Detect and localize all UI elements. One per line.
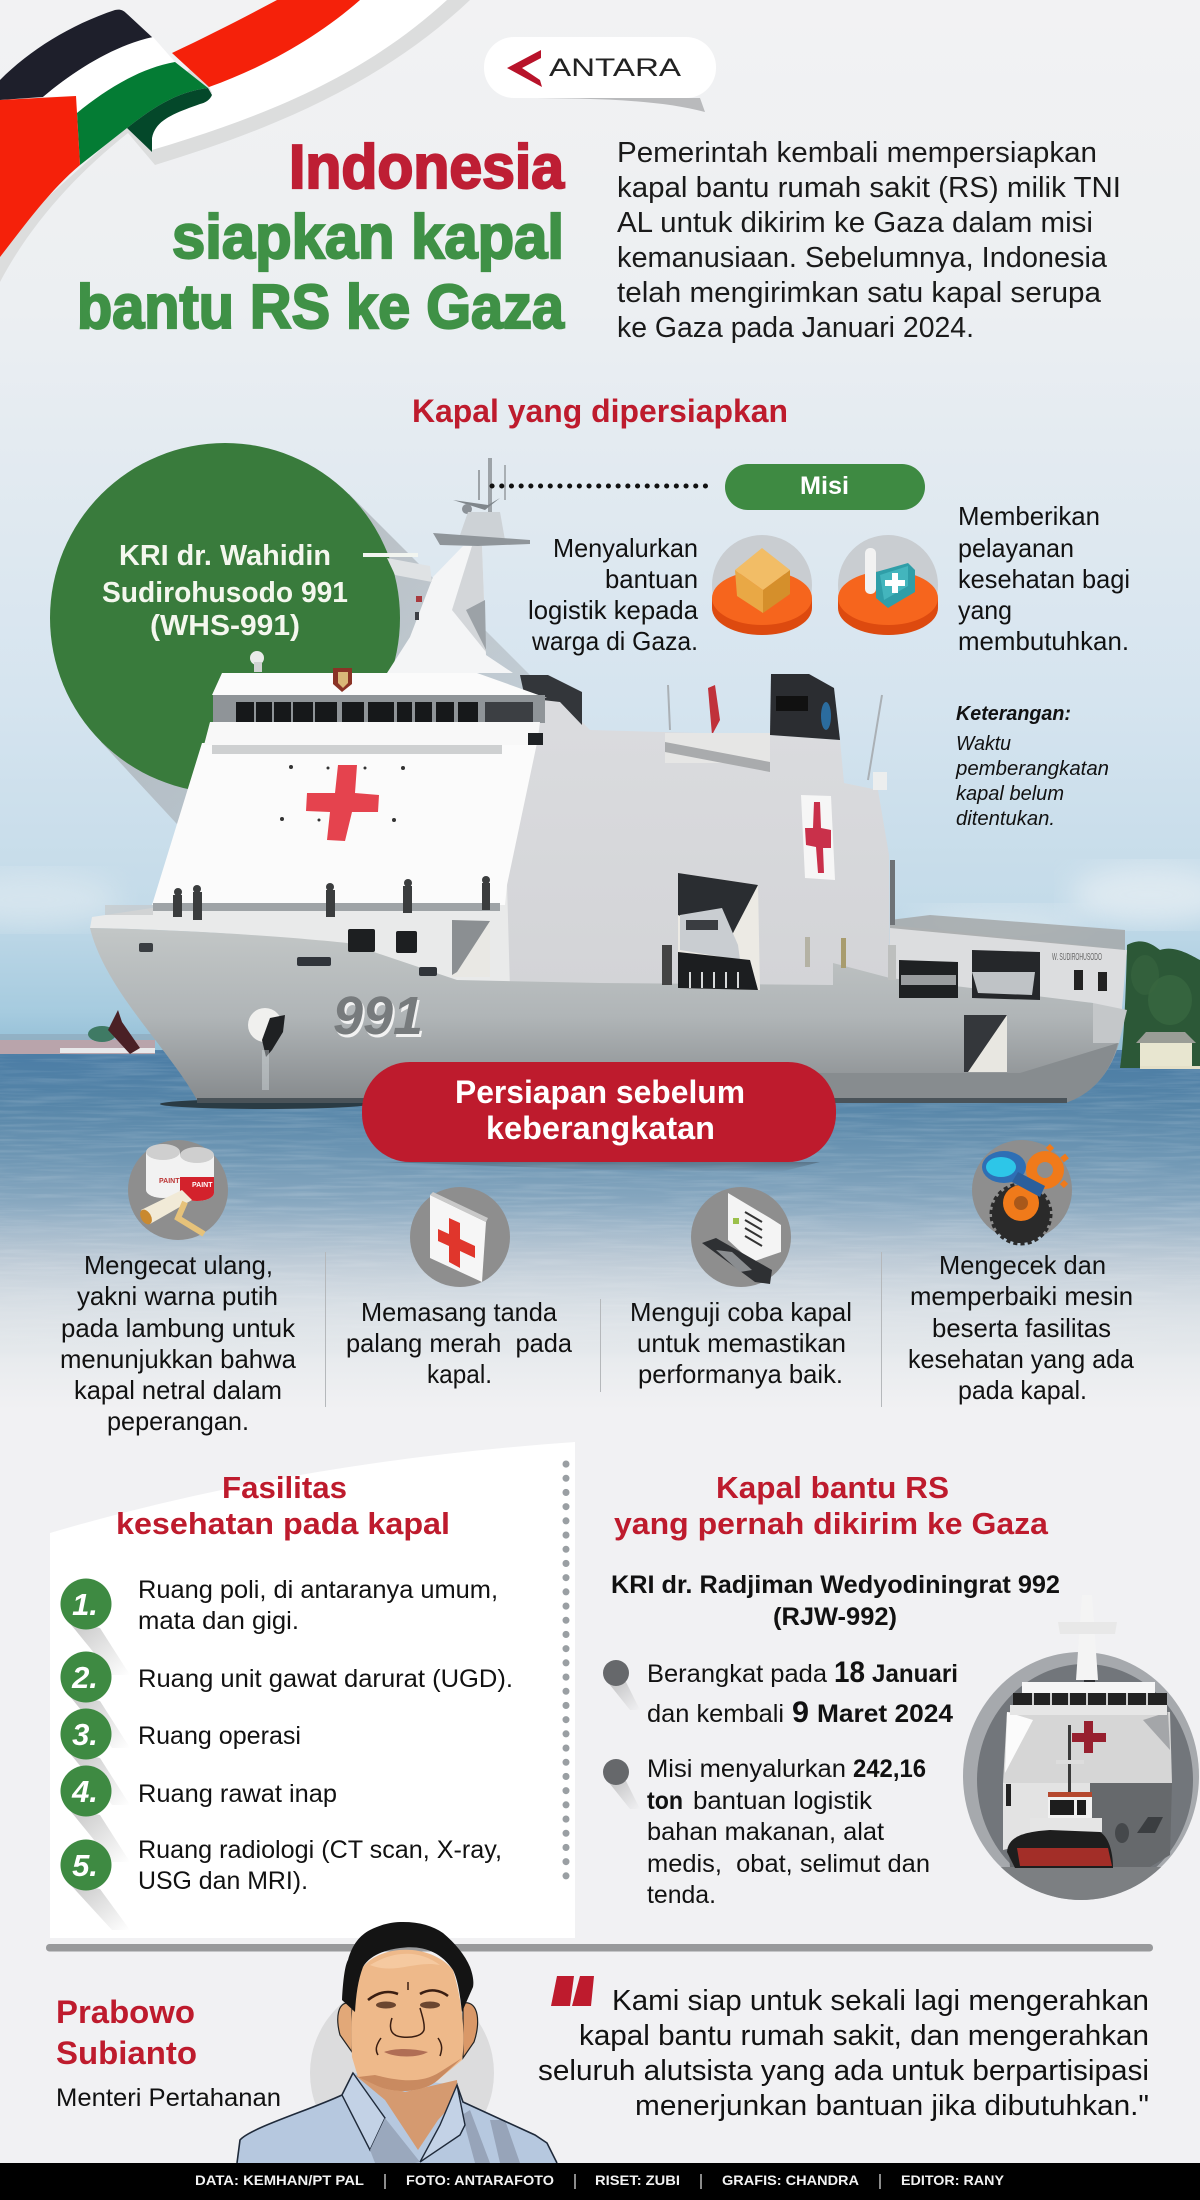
list items: USG dan MRI). — [138, 1867, 308, 1895]
footer credits: RISET: ZUBI — [595, 2172, 680, 2188]
ship aft bays — [888, 945, 1107, 1072]
bullet: departure dates: Maret 2024 — [817, 1700, 953, 1728]
brows and eyes — [368, 1990, 448, 2000]
quote text — [538, 1985, 1149, 2122]
portrait: Prabowo Subianto — [237, 1922, 557, 2165]
text: repaint — [60, 1250, 297, 1436]
heading: Kapal yang dipersiapkan: Kapal yang dipersiapkan — [412, 393, 788, 429]
ship hull number 991: 991 — [333, 986, 423, 1046]
text: ship trial — [630, 1297, 852, 1389]
heading: Fasilitas kesehatan pada kapal: Fasilitas — [222, 1470, 347, 1505]
quote text: kapal bantu rumah sakit, dan mengerahkan — [579, 2020, 1149, 2052]
quote mark — [551, 1976, 594, 2006]
ship deck rail and crew — [105, 765, 500, 920]
note: Keterangan: ditentukan. — [956, 808, 1055, 830]
heading: Kapal bantu RS yang pernah dikirim ke Gaza: yang pernah dikirim ke Gaza — [614, 1506, 1049, 1541]
icon: engine gears — [972, 1140, 1072, 1243]
bullet: mission cargo — [603, 1755, 930, 1909]
list items — [138, 1576, 513, 1895]
mission text: health service: yang — [958, 595, 1012, 625]
photo ship mast — [1058, 1595, 1117, 1692]
numbered list markers: 5. — [72, 1848, 98, 1883]
heading: Fasilitas kesehatan pada kapal — [116, 1470, 450, 1541]
text: engine check — [908, 1250, 1135, 1405]
far shoreline with buildings and trees — [0, 941, 1200, 1069]
ship aft bays: W. SUDIROHUSODO — [1052, 952, 1102, 963]
ears — [338, 2003, 352, 2052]
bullet: departure dates: Berangkat pada — [647, 1660, 827, 1688]
bullet: mission cargo: ton — [647, 1787, 683, 1815]
ship mast — [250, 458, 530, 673]
panel: ship name circle — [50, 443, 400, 793]
shadow of green circle — [101, 494, 600, 1000]
quote text: seluruh alutsista yang ada untuk berpartisipasi — [538, 2055, 1149, 2087]
quote text: Kami siap untuk sekali lagi mengerahkan — [612, 1985, 1149, 2017]
heading: Fasilitas kesehatan pada kapal: kesehatan pada kapal — [116, 1506, 450, 1541]
ship hull number 991: 991 — [335, 989, 425, 1049]
photo ship bridge — [1010, 1682, 1167, 1753]
bullet: departure dates: 18 — [834, 1656, 865, 1689]
mission text: logistics: logistik kepada — [528, 595, 699, 625]
title: Indonesia — [289, 133, 564, 202]
mission text: health service: Memberikan — [958, 501, 1100, 531]
pill: Persiapan sebelum keberangkatan — [362, 1062, 836, 1172]
heading: Kapal bantu RS yang pernah dikirim ke Gaza — [614, 1470, 1049, 1541]
icon: logistics box — [712, 535, 812, 635]
text: engine check: kesehatan yang ada — [908, 1344, 1135, 1374]
text: red cross sign — [346, 1297, 573, 1389]
footer credits: GRAFIS: CHANDRA — [722, 2172, 859, 2188]
list items: Ruang poli, di antaranya umum, — [138, 1576, 498, 1604]
pill: Misi: Misi — [800, 472, 849, 500]
photo: KRI dr. Radjiman ship circle — [963, 1622, 1199, 1900]
nose and mouth lines — [376, 1982, 442, 2056]
text: engine check: Mengecek dan — [939, 1250, 1106, 1280]
ship boat bay — [662, 873, 846, 990]
list items: Ruang operasi — [138, 1722, 301, 1750]
text: repaint: yakni warna putih — [77, 1281, 278, 1311]
heading: Kapal bantu RS yang pernah dikirim ke Gaza: Kapal bantu RS — [716, 1470, 949, 1505]
ship side cross panel — [801, 795, 835, 880]
text: red cross sign: kapal. — [427, 1359, 492, 1389]
note: Keterangan: Keterangan: — [956, 703, 1071, 725]
numbered list markers: 4. — [71, 1774, 98, 1809]
icon: paint cans and roller: PAINT — [159, 1178, 180, 1185]
text: ship trial: untuk memastikan — [637, 1328, 846, 1358]
list items: mata dan gigi. — [138, 1607, 299, 1635]
flag ribbon: Palestine and Indonesia — [0, 0, 470, 282]
footer credits — [0, 2163, 1200, 2200]
panel: ship name circle: Sudirohusodo 991 — [102, 577, 348, 609]
bullet: mission cargo: medis, obat, selimut dan — [647, 1850, 930, 1878]
footer credits: DATA: KEMHAN/PT PAL — [195, 2172, 364, 2188]
mission text: health service: kesehatan bagi — [958, 564, 1130, 594]
ship aft deck — [890, 860, 1127, 1043]
bullet: departure dates: dan kembali — [647, 1700, 784, 1728]
bullet: departure dates — [603, 1656, 958, 1729]
quote text: menerjunkan bantuan jika dibutuhkan." — [635, 2090, 1149, 2122]
bullet: departure dates: 9 — [792, 1696, 809, 1729]
title — [77, 133, 564, 342]
divider bar — [46, 1944, 1153, 1952]
ship name: KRI dr. Radjiman Wedyodiningrat 992: KRI dr. Radjiman Wedyodiningrat 992 — [611, 1571, 1060, 1599]
text: ship trial: performanya baik. — [638, 1359, 843, 1389]
icon: paint cans and roller — [128, 1140, 228, 1240]
numbered list markers: 2. — [71, 1660, 98, 1695]
footer credits: EDITOR: RANY — [901, 2172, 1005, 2188]
mission text: logistics: warga di Gaza. — [531, 626, 698, 656]
text: repaint: Mengecat ulang, — [84, 1250, 273, 1280]
intro paragraph: Pemerintah kembali mempersiapkan — [617, 137, 1097, 169]
panel: ship name circle: KRI dr. Wahidin — [119, 540, 331, 572]
list items: Ruang rawat inap — [138, 1780, 337, 1808]
pill: Persiapan sebelum keberangkatan: keberangkatan — [486, 1110, 715, 1146]
note: Keterangan — [955, 703, 1109, 830]
text: repaint: kapal netral dalam — [74, 1375, 282, 1405]
text: red cross sign: Memasang tanda — [361, 1297, 558, 1327]
panel: ship name circle: (WHS-991) — [150, 610, 300, 642]
intro paragraph — [617, 137, 1121, 344]
list items: Ruang unit gawat darurat (UGD). — [138, 1665, 513, 1693]
intro paragraph: kapal bantu rumah sakit (RS) milik TNI — [617, 172, 1121, 204]
mission connector dotted line — [492, 484, 713, 488]
bullet: mission cargo: 242,16 — [853, 1755, 926, 1783]
text: engine check: beserta fasilitas — [932, 1313, 1111, 1343]
neck — [355, 2075, 458, 2150]
footer credits: FOTO: ANTARAFOTO — [406, 2172, 554, 2188]
text: ship trial: Menguji coba kapal — [630, 1297, 852, 1327]
ship name: KRI dr. Radjiman Wedyodiningrat 992: (RJW-992) — [773, 1603, 897, 1631]
title: siapkan kapal — [172, 203, 564, 272]
intro paragraph: telah mengirimkan satu kapal serupa — [617, 277, 1102, 309]
mission text: logistics: bantuan — [605, 564, 698, 594]
numbered list markers: 1. — [72, 1587, 98, 1622]
list items: Ruang radiologi (CT scan, X-ray, — [138, 1836, 502, 1864]
logo: ANTARA — [484, 37, 716, 112]
ship red cross front — [306, 765, 379, 841]
intro paragraph: AL untuk dikirim ke Gaza dalam misi — [617, 207, 1093, 239]
note: Keterangan: Waktu — [956, 733, 1011, 755]
ship side superstructure — [480, 700, 890, 990]
text: repaint: menunjukkan bahwa — [60, 1344, 297, 1374]
ship: KRI dr. Wahidin Sudirohusodo 991 — [90, 458, 1127, 1109]
logo: ANTARA: ANTARA — [549, 54, 681, 82]
intro paragraph: kemanusiaan. Sebelumnya, Indonesia — [617, 242, 1108, 274]
ship front white face — [152, 743, 537, 905]
ship foredeck — [90, 883, 510, 990]
bullet: mission cargo: bahan makanan, alat — [647, 1818, 884, 1846]
pill: Persiapan sebelum keberangkatan: Persiapan sebelum — [455, 1074, 745, 1110]
title: bantu RS ke Gaza — [77, 273, 564, 342]
bullet: mission cargo: tenda. — [647, 1881, 716, 1909]
numbered list markers — [60, 1578, 130, 1930]
hair — [342, 1922, 473, 2012]
ship bridge — [204, 668, 547, 754]
numbered list markers: 3. — [72, 1717, 98, 1752]
bullet: departure dates: Januari — [872, 1660, 958, 1688]
shirt — [237, 2073, 557, 2163]
text: engine check: pada kapal. — [958, 1375, 1087, 1405]
note: Keterangan: pemberangkatan — [955, 758, 1109, 780]
mission text: logistics — [528, 533, 699, 656]
collar — [342, 2073, 385, 2150]
bullet: mission cargo: Misi menyalurkan — [647, 1755, 846, 1783]
speaker name and role: Subianto — [56, 2035, 197, 2071]
icon: ship trial checklist — [691, 1187, 791, 1287]
text: engine check: memperbaiki mesin — [910, 1281, 1133, 1311]
text: repaint: pada lambung untuk — [61, 1313, 296, 1343]
intro paragraph: ke Gaza pada Januari 2024. — [617, 312, 974, 344]
ship bow fittings — [108, 920, 490, 1090]
text: red cross sign: palang merah pada — [346, 1328, 573, 1358]
mission text: logistics: Menyalurkan — [553, 533, 698, 563]
mission text: health service: pelayanan — [958, 533, 1074, 563]
photo tugboat — [1007, 1725, 1113, 1868]
mission text: health service — [958, 501, 1130, 656]
ship funnel — [520, 674, 887, 790]
text: repaint: peperangan. — [107, 1406, 249, 1436]
icon: health kit — [838, 535, 938, 635]
icon: paint cans and roller: PAINT — [192, 1182, 213, 1189]
panel: health facilities — [50, 1442, 575, 1938]
note: Keterangan: kapal belum — [956, 783, 1064, 805]
pill: Misi — [725, 464, 925, 510]
icon: red cross sign — [410, 1187, 510, 1287]
speaker name and role — [56, 1994, 281, 2112]
ship waterline shadow — [160, 1099, 370, 1109]
speaker name and role: Prabowo — [56, 1994, 195, 2030]
ship name: KRI dr. Radjiman Wedyodiningrat 992 — [611, 1571, 1060, 1631]
mission text: health service: membutuhkan. — [958, 626, 1129, 656]
speaker name and role: Menteri Pertahanan — [56, 2084, 281, 2112]
bullet: mission cargo: bantuan logistik — [693, 1787, 873, 1815]
ship lower hull — [90, 928, 1119, 1103]
face — [351, 1950, 464, 2091]
